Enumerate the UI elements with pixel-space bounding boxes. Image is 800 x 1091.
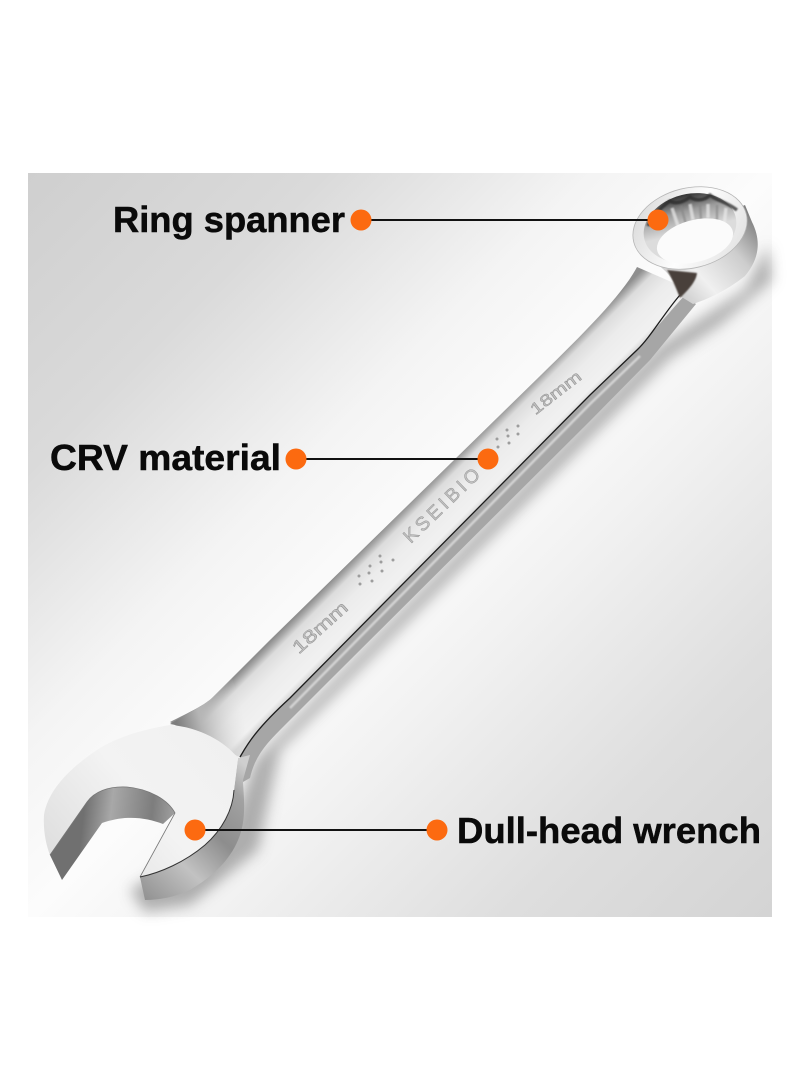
dot [286, 448, 306, 470]
engraved size right: 18mm [527, 368, 585, 419]
shank side face [240, 295, 696, 782]
ring head body [640, 205, 758, 304]
leader line [195, 829, 437, 831]
dot [184, 820, 206, 840]
callout: CRV material [50, 437, 498, 478]
neck shading [170, 678, 250, 758]
dot [350, 210, 372, 230]
ring head [624, 175, 758, 304]
ring head rim [624, 175, 756, 281]
engraved size left: 18mm [288, 597, 352, 658]
leader line [296, 458, 488, 460]
engraved brand: KSEIBIO [400, 464, 485, 548]
ring head inner teeth [636, 184, 744, 272]
wrench photo illustration [44, 175, 772, 912]
open head [44, 725, 250, 900]
wrench shadow [130, 245, 772, 912]
shank top face [170, 267, 690, 757]
open head face [44, 725, 238, 877]
shank black edge [240, 295, 680, 757]
leader line [361, 219, 657, 221]
engraved dots [358, 424, 520, 586]
callout: Dull-head wrench [184, 810, 761, 851]
label: CRV material [50, 437, 281, 478]
engraved markings [288, 368, 585, 658]
open head throat [50, 787, 175, 880]
ring head hole [652, 211, 738, 271]
ring head dark reflection [667, 270, 697, 298]
callout: Ring spanner [113, 199, 668, 240]
open head side wall [140, 755, 250, 900]
background panel [28, 173, 772, 917]
label: Ring spanner [113, 199, 345, 240]
label: Dull-head wrench [457, 810, 761, 851]
